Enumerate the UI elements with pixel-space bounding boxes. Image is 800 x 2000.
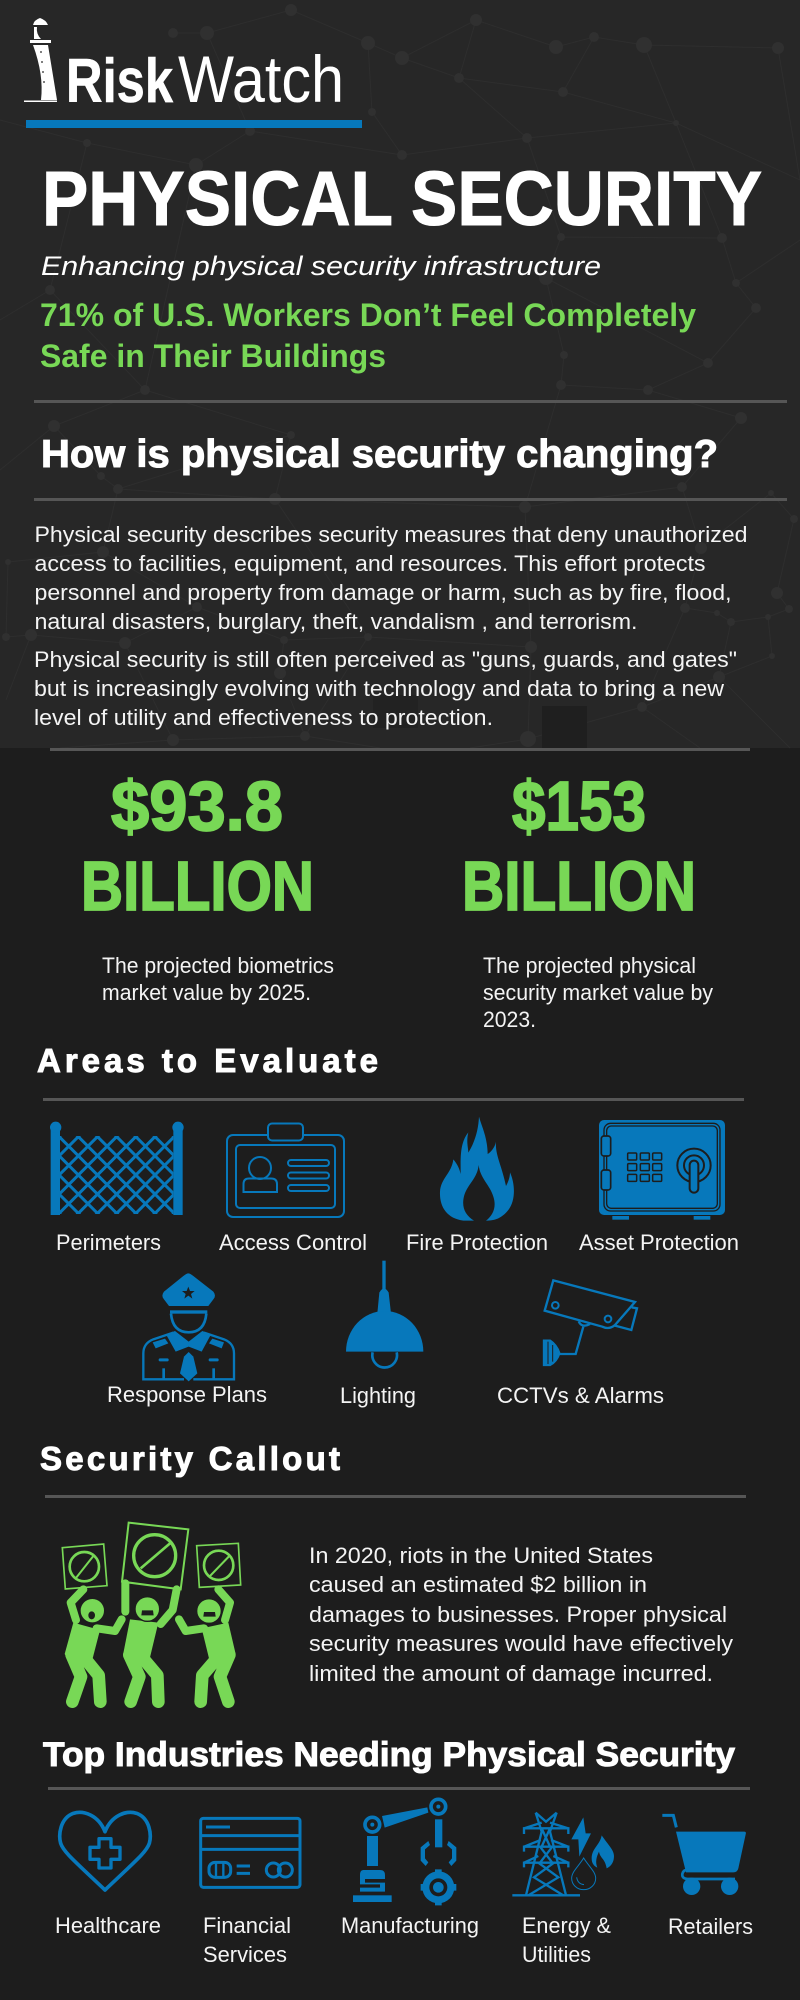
stat value: $93.8 [111, 767, 283, 845]
text block: definition: personnel and property from damage or harm, such as by fire, flood, [34, 580, 732, 605]
icon: protesters with signs [62, 1523, 241, 1702]
label: Healthcare [55, 1913, 161, 1938]
area: response plans [107, 1273, 267, 1407]
label: Lighting [340, 1383, 416, 1408]
industry: financial services [201, 1818, 300, 1967]
stat description [102, 953, 334, 1005]
stat description: security market value by [483, 980, 713, 1005]
callout text: security measures would have effectively [309, 1631, 734, 1656]
panel: areas to evaluate [0, 1117, 739, 1408]
text block: definition: access to facilities, equipment, and resources. This effort protects [34, 551, 706, 576]
heading: areas to evaluate: Areas to Evaluate [37, 1042, 378, 1079]
stat description [483, 953, 713, 1032]
stat unit: BILLION [81, 847, 314, 925]
label: Access Control [219, 1230, 367, 1255]
label [522, 1913, 611, 1967]
stat: biometrics market [81, 767, 334, 1005]
area: lighting [340, 1261, 423, 1408]
icon: safe [599, 1120, 725, 1220]
stat description: The projected physical [483, 953, 696, 978]
logo wordmark: Risk: Risk [66, 47, 173, 116]
industry: energy and utilities [512, 1813, 614, 1967]
panel: top industries [55, 1799, 753, 1967]
label: Manufacturing [341, 1913, 479, 1938]
heading: top industries: Top Industries Needing Physical Security [43, 1736, 735, 1774]
text block: evolving perception: level of utility and effectiveness to protection. [34, 705, 493, 730]
label: Fire Protection [406, 1230, 548, 1255]
stat value: $153 [512, 767, 646, 845]
icon: shopping cart [662, 1815, 746, 1895]
label: Perimeters [56, 1230, 161, 1255]
icon: pendant lamp [346, 1261, 423, 1368]
logo: RiskWatch [24, 18, 344, 116]
headline statistic: 71% of U.S. Workers Don’t Feel Completely [40, 297, 696, 333]
area: asset protection [579, 1120, 739, 1255]
heading: how is physical security changing: How is physical security changing? [41, 433, 718, 476]
text block: definition: Physical security describes security measures that deny unauthorized [34, 522, 748, 547]
stat description: market value by 2025. [102, 980, 311, 1005]
label: CCTVs & Alarms [497, 1383, 664, 1408]
icon: police officer [143, 1273, 234, 1381]
text block: definition: natural disasters, burglary, theft, vandalism , and terrorism. [34, 609, 638, 634]
callout text: caused an estimated $2 billion in [309, 1572, 647, 1597]
logo wordmark: Watch: Watch [178, 42, 344, 116]
stat description: 2023. [483, 1007, 536, 1032]
panel: network background [0, 0, 800, 748]
callout text [309, 1543, 734, 1686]
callout text: limited the amount of damage incurred. [309, 1661, 713, 1686]
stat unit: BILLION [462, 847, 696, 925]
headline statistic: Safe in Their Buildings [40, 338, 386, 374]
text block: evolving perception: but is increasingly evolving with technology and data to bring a new [34, 676, 725, 701]
icon: security camera [544, 1280, 637, 1365]
icon: fence [50, 1122, 184, 1215]
label: Retailers [668, 1914, 753, 1939]
stat: physical security market [462, 767, 713, 1032]
area: access control [219, 1124, 367, 1255]
area: cctvs and alarms [497, 1280, 664, 1408]
area: perimeters [50, 1122, 184, 1250]
logo underline [26, 120, 362, 128]
label [203, 1913, 291, 1967]
label: Energy & [522, 1913, 611, 1938]
area: fire protection [406, 1117, 548, 1255]
icon: flame [440, 1117, 514, 1221]
icon: credit card [201, 1818, 300, 1887]
label: Services [203, 1942, 287, 1967]
label: Asset Protection [579, 1230, 739, 1255]
industry: healthcare [55, 1812, 161, 1938]
stat description: The projected biometrics [102, 953, 334, 978]
text block: evolving perception: Physical security is still often perceived as "guns, guards, and gates" [34, 647, 737, 672]
headline statistic [40, 297, 696, 374]
text block: evolving perception [34, 647, 737, 730]
icon: lighthouse [24, 18, 57, 102]
callout text: damages to businesses. Proper physical [309, 1602, 727, 1627]
text block: definition [34, 522, 748, 634]
industry: retailers [662, 1815, 753, 1939]
icon: pylon, bolt, drop, flame [512, 1813, 614, 1895]
label: Utilities [522, 1942, 591, 1967]
subtitle: Enhancing physical security infrastructure [41, 251, 601, 281]
label: Response Plans [107, 1382, 267, 1407]
industry: manufacturing [341, 1799, 479, 1938]
icon: robot arm [353, 1799, 456, 1905]
heading: security callout: Security Callout [40, 1440, 340, 1477]
icon: id badge [227, 1124, 344, 1217]
label: Financial [203, 1913, 291, 1938]
callout text: In 2020, riots in the United States [309, 1543, 653, 1568]
icon: heart with cross [60, 1812, 150, 1890]
